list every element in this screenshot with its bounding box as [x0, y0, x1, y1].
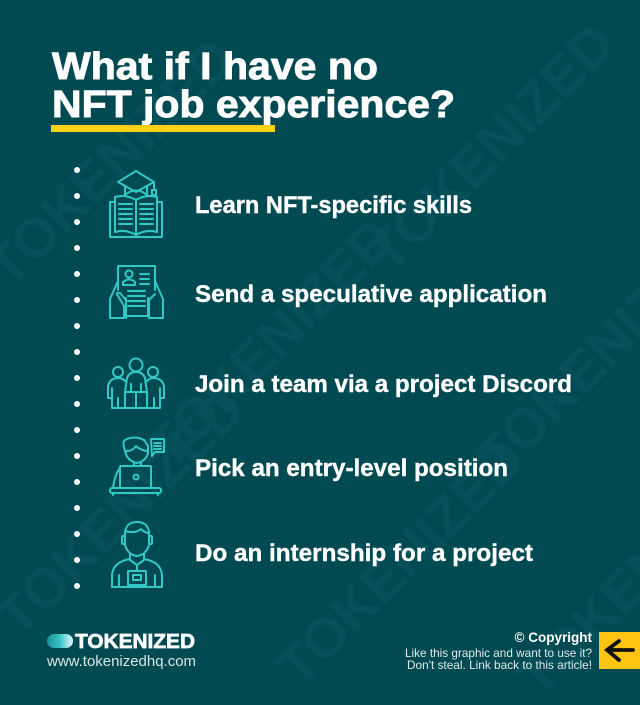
- icon: application in hands: [110, 266, 163, 318]
- copyright notice: Don't steal. Link back to this article!: [407, 658, 592, 672]
- title: [52, 46, 455, 126]
- logo: [47, 631, 195, 653]
- icon: worker at laptop: [110, 438, 164, 495]
- list item labels: Do an internship for a project: [195, 540, 533, 567]
- background watermark: TOKENIZED: [354, 11, 627, 283]
- arrow box: [599, 632, 640, 669]
- title underline: [51, 125, 275, 132]
- title: What if I have no: [52, 46, 378, 88]
- list item labels: Pick an entry-level position: [195, 455, 508, 482]
- icon: book and graduation cap: [110, 171, 162, 237]
- icon: intern with badge: [112, 522, 162, 587]
- list item labels: Learn NFT-specific skills: [195, 192, 472, 219]
- list item labels: Send a speculative application: [195, 281, 547, 308]
- icon: left arrow: [607, 641, 633, 660]
- list item labels: Join a team via a project Discord: [195, 371, 572, 398]
- copyright notice: © Copyright: [515, 630, 592, 645]
- title: NFT job experience?: [52, 84, 455, 126]
- logo mark: [47, 634, 73, 648]
- logo wordmark: TOKENIZED: [75, 631, 195, 653]
- website url: www.tokenizedhq.com: [46, 654, 196, 670]
- background watermark: TOKENIZED: [134, 206, 407, 478]
- icon: team of people: [108, 358, 164, 408]
- dotted timeline: [74, 167, 80, 589]
- list item labels: [195, 192, 572, 567]
- copyright notice: [405, 630, 592, 672]
- copyright notice: Like this graphic and want to use it?: [405, 646, 592, 660]
- background watermark: TOKENIZED: [264, 426, 537, 698]
